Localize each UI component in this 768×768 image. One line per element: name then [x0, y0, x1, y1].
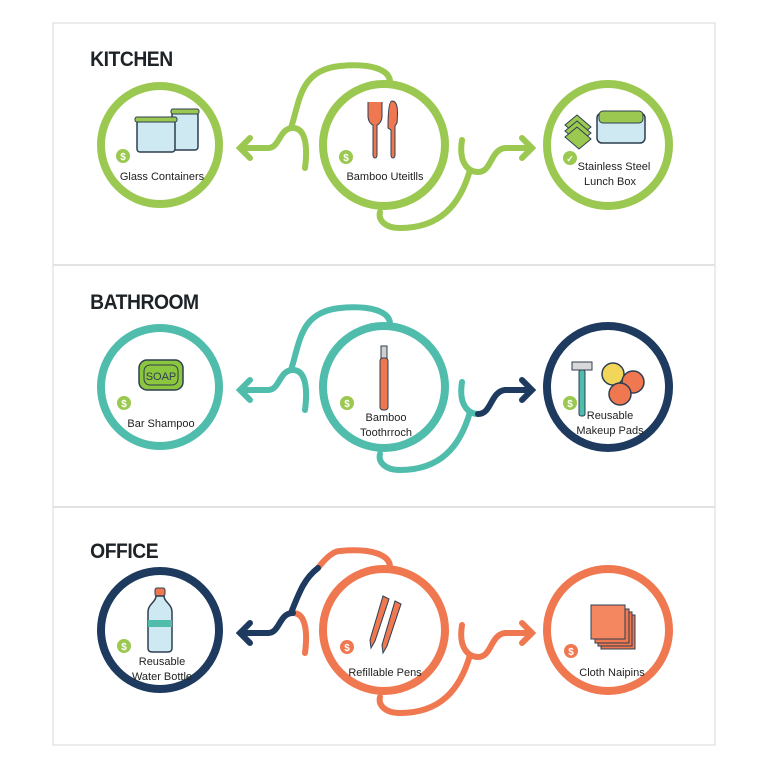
item: cloth napkins: [547, 569, 669, 691]
item: bar shampoo: SOAP: [146, 371, 176, 383]
connectors: office: [293, 550, 532, 713]
heading: bathroom: BATHROOM: [90, 291, 199, 314]
item: reusable makeup pads: Reusable: [587, 410, 633, 422]
item: refillable pens: $: [344, 643, 350, 654]
panel: kitchen: [90, 48, 669, 228]
item: reusable water bottle: $: [121, 642, 127, 653]
item: stainless steel lunch box: Lunch Box: [584, 176, 636, 188]
item: reusable water bottle: Reusable: [139, 656, 185, 668]
item: reusable water bottle: [101, 571, 219, 689]
item: glass containers: $: [120, 152, 126, 163]
item: reusable makeup pads: $: [567, 399, 573, 410]
connectors: kitchen: [240, 65, 532, 228]
item: bamboo toothbrush: [323, 326, 445, 448]
panel: bathroom: [90, 291, 669, 470]
item: bar shampoo: [101, 328, 219, 446]
panel: office: [90, 540, 669, 713]
item: cloth napkins: $: [568, 647, 574, 658]
item: bamboo toothbrush: Toothrroch: [360, 427, 412, 439]
item: bamboo utensils: Bamboo Uteitlls: [346, 171, 424, 183]
heading: office: OFFICE: [90, 540, 158, 563]
item: stainless steel lunch box: Stainless Steel: [578, 161, 650, 173]
item: bamboo toothbrush: Bamboo: [366, 412, 406, 424]
item: bar shampoo: Bar Shampoo: [127, 418, 195, 430]
item: refillable pens: Refillable Pens: [348, 667, 422, 679]
item: refillable pens: [323, 569, 445, 691]
item: bamboo toothbrush: $: [344, 399, 350, 410]
item: glass containers: Glass Containers: [120, 171, 205, 183]
item: stainless steel lunch box: [547, 84, 669, 206]
heading: kitchen: KITCHEN: [90, 48, 173, 71]
item: bar shampoo: $: [121, 399, 127, 410]
item: reusable makeup pads: [547, 326, 669, 448]
item: bamboo utensils: $: [343, 153, 349, 164]
item: glass containers: [101, 86, 219, 204]
item: reusable water bottle: Water Bottle: [132, 671, 192, 683]
connectors: bathroom: [240, 307, 478, 470]
item: bamboo utensils: [323, 84, 445, 206]
item: cloth napkins: Cloth Naipins: [579, 667, 645, 679]
item: reusable makeup pads: Makeup Pads: [576, 425, 644, 437]
item: stainless steel lunch box: ✓: [566, 154, 574, 164]
